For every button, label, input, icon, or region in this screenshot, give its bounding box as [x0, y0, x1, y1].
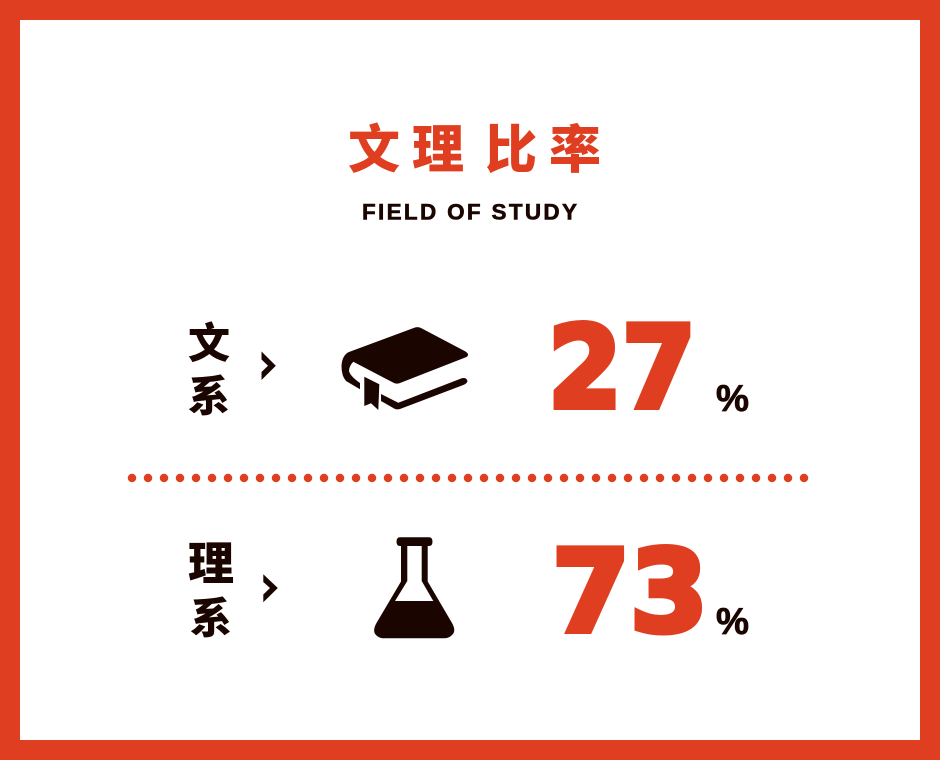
title: chinese heading — [348, 122, 601, 180]
value: 73 percent: 73 — [552, 526, 708, 658]
value: 27 percent: 27 — [548, 302, 696, 434]
value: 27 percent: % — [716, 378, 749, 419]
label: humanities vertical: 系 — [188, 373, 230, 420]
title: chinese heading: 文 — [348, 122, 400, 180]
label: sciences vertical: 理 — [188, 538, 234, 590]
icon: flask — [374, 537, 454, 638]
subtitle: field of study: FIELD OF STUDY — [362, 200, 577, 224]
label: humanities vertical — [188, 320, 230, 420]
label: sciences vertical: 系 — [190, 595, 232, 642]
arrow: humanities chevron — [262, 352, 276, 380]
title: chinese heading: 理 — [412, 122, 464, 180]
title: chinese heading: 比 — [485, 122, 537, 180]
value: 73 percent: % — [716, 601, 749, 642]
row: sciences — [188, 526, 749, 658]
arrow: sciences chevron — [263, 574, 278, 602]
icon: book — [342, 327, 468, 410]
label: sciences vertical — [188, 538, 234, 642]
row: humanities — [188, 302, 749, 434]
title: chinese heading: 率 — [549, 122, 601, 180]
label: humanities vertical: 文 — [188, 320, 230, 367]
divider: dotted line — [132, 474, 804, 482]
